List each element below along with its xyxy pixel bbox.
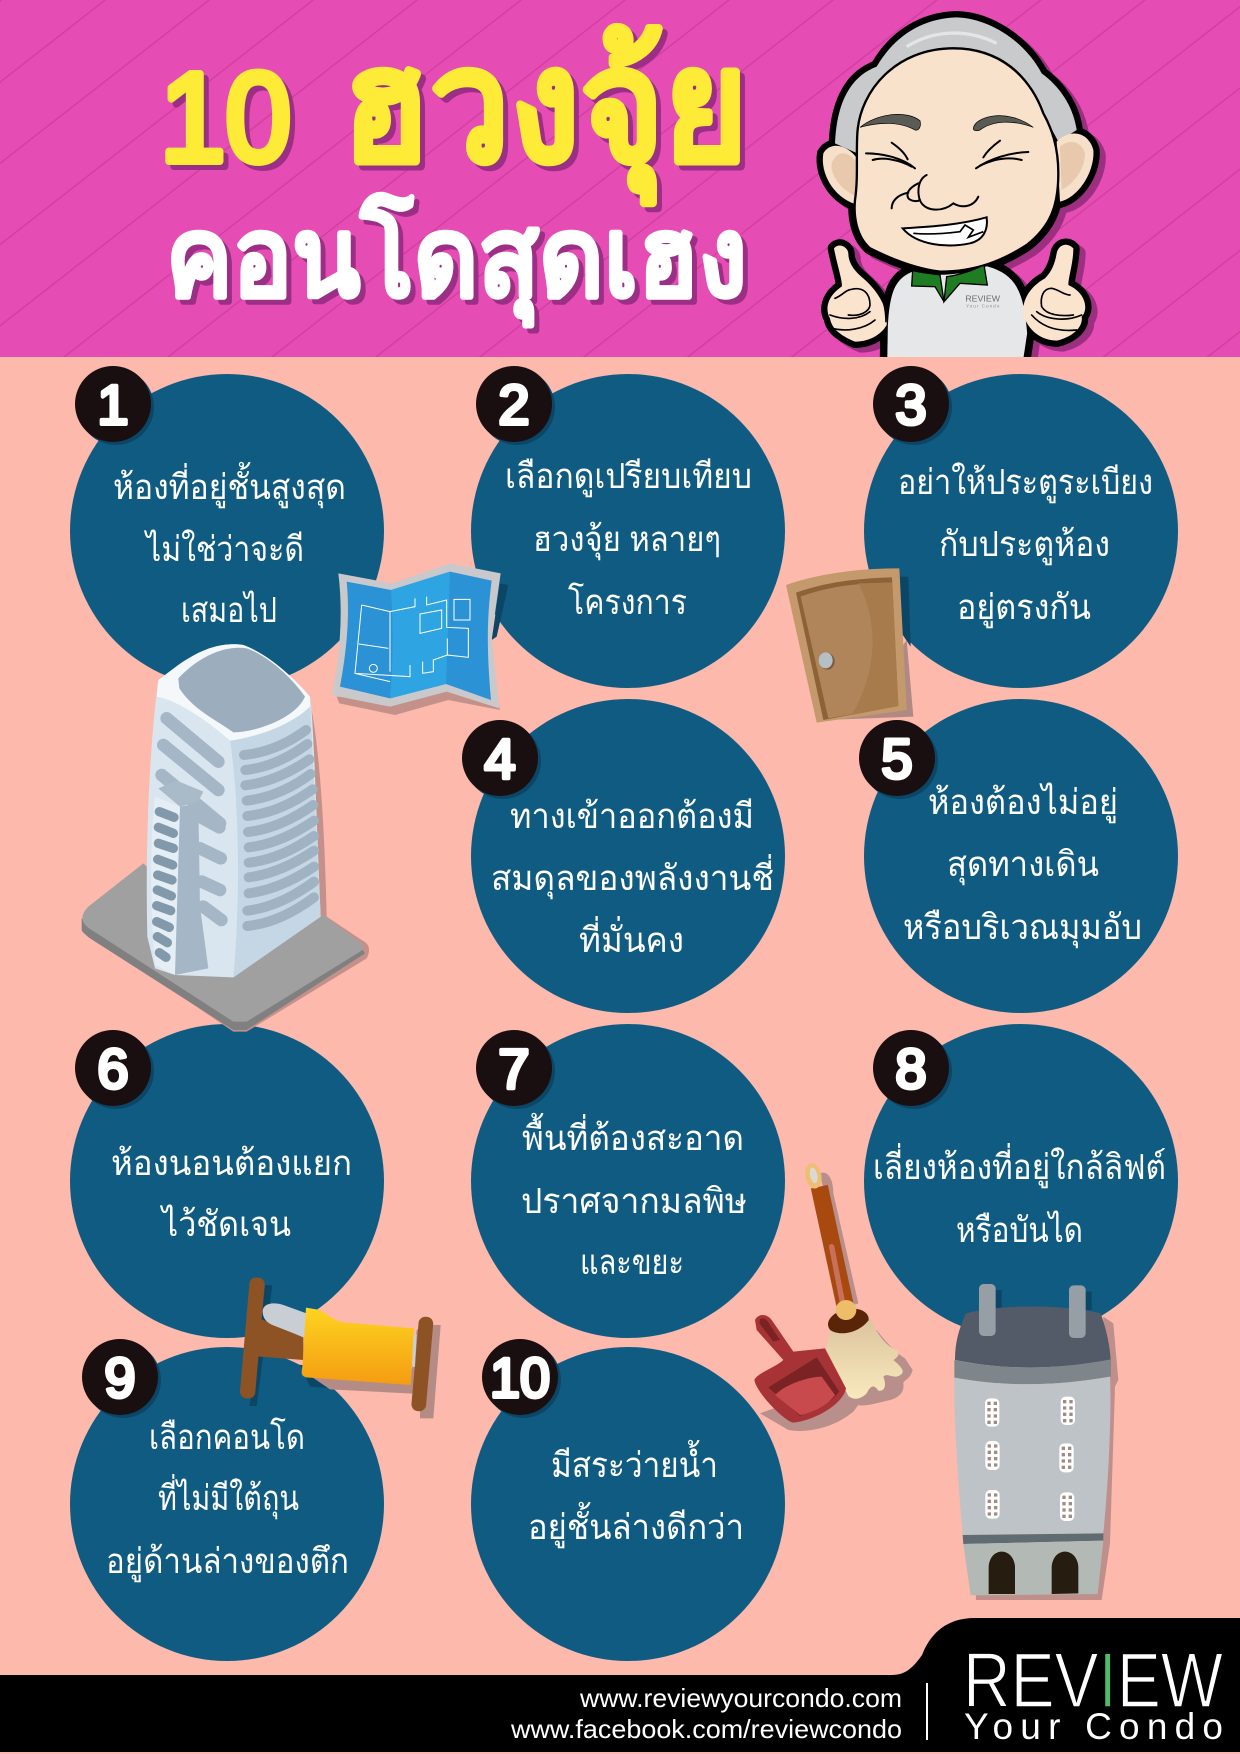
badge 4 [462, 720, 541, 799]
title line 1: ฮวงจุ้ย [347, 21, 753, 208]
text 10: มีสระว่ายน้ำ [551, 1439, 718, 1485]
tip 6 [75, 1030, 352, 1244]
badge 9: 9 [104, 1346, 136, 1409]
text 1: ไม่ใช่ว่าจะดี [143, 529, 304, 569]
badge 3 [873, 366, 952, 445]
title line 1: ฮวงจุ้ย [342, 16, 748, 203]
tip 5 [859, 720, 1142, 948]
text 3: กับประตูห้อง [939, 525, 1110, 565]
tip 3 [873, 366, 1153, 628]
text 5: ห้องต้องไม่อยู่ [928, 782, 1118, 823]
right ear [1057, 134, 1093, 202]
text 10: อยู่ชั้นล่างดีกว่า [528, 1501, 744, 1548]
text 9: อยู่ด้านล่างของตึก [106, 1542, 349, 1582]
left hand [827, 246, 887, 342]
text 4: สมดุลของพลังงานชี่ [491, 854, 774, 899]
text 2 [505, 457, 752, 622]
text 1: ห้องที่อยู่ชั้นสูงสุด [113, 461, 346, 508]
badge 10: 10 [490, 1346, 550, 1409]
text 3: อยู่ตรงกัน [957, 588, 1091, 628]
shirt [887, 266, 1028, 357]
text 9: เลือกคอนโด [149, 1417, 305, 1457]
badge 2 [476, 366, 555, 445]
text 3: อย่าให้ประตูระเบียง [898, 462, 1153, 503]
icon: office tower [82, 644, 369, 1032]
mascot [823, 17, 1099, 371]
title line 1: 10 [165, 52, 296, 193]
tip 4 [462, 720, 774, 960]
badge 7: 7 [498, 1037, 530, 1100]
tip 7 [476, 1030, 747, 1282]
badge 1: 1 [97, 373, 129, 436]
text 1 [113, 461, 346, 630]
text 1: เสมอไป [181, 590, 277, 630]
text 5: หรือบริเวณมุมอับ [903, 908, 1142, 948]
footer [0, 1618, 1240, 1752]
tip 8 [873, 1030, 1166, 1250]
text 5 [903, 782, 1142, 948]
circle panels [70, 374, 1178, 1661]
website links: www.facebook.com/reviewcondo [510, 1714, 902, 1744]
shirt logo: Your Condo [966, 303, 1000, 308]
brand logo: REVIEW [963, 1636, 1223, 1724]
icon: broom and dustpan [754, 1162, 913, 1431]
icon: bed [239, 1277, 441, 1418]
right hand [1023, 245, 1085, 341]
icon: door [786, 568, 913, 723]
icon: grey building [954, 1284, 1118, 1600]
badge 6 [75, 1030, 154, 1109]
text 2: เลือกดูเปรียบเทียบ [505, 457, 752, 497]
text 10 [528, 1439, 744, 1548]
eyes [866, 141, 1028, 168]
website links: www.reviewyourcondo.com [579, 1683, 902, 1713]
hair [835, 17, 1077, 153]
tip 2 [476, 366, 752, 622]
badge 8 [873, 1030, 952, 1109]
badge 6: 6 [97, 1037, 129, 1100]
badge 8: 8 [895, 1037, 927, 1100]
smile [903, 217, 987, 245]
badge 3: 3 [895, 373, 927, 436]
text 6: ไว้ชัดเจน [159, 1204, 291, 1244]
text 5: สุดทางเดิน [947, 845, 1099, 885]
text 9 [106, 1417, 349, 1582]
badge 1 [75, 366, 154, 445]
text 8 [873, 1143, 1166, 1250]
badge 10 [482, 1339, 561, 1418]
text 7: และขยะ [580, 1243, 684, 1282]
text 7: พื้นที่ต้องสะอาด [522, 1112, 744, 1158]
badge 7 [476, 1030, 555, 1109]
shirt logo: REVIEW [965, 294, 1001, 304]
title line 1: 10 [160, 47, 291, 188]
face [855, 48, 1058, 272]
title line 2: คอนโดสุดเฮง [171, 200, 752, 331]
text 8: เลี่ยงห้องที่อยู่ใกล้ลิฟต์ [873, 1143, 1166, 1188]
text 8: หรือบันได [956, 1210, 1083, 1250]
brand logo: Your Condo [964, 1706, 1223, 1747]
badge 9 [82, 1339, 161, 1418]
text 2: โครงการ [568, 582, 687, 622]
text 2: ฮวงจุ้ย หลายๆ [533, 520, 721, 560]
title line 2: คอนโดสุดเฮง [166, 195, 747, 326]
tip 9 [82, 1339, 349, 1582]
icon: floor plan map [332, 563, 508, 715]
text 4 [491, 797, 774, 960]
badge 5: 5 [881, 727, 913, 790]
text 9: ที่ไม่มีใต้ถุน [158, 1474, 299, 1519]
text 7: ปราศจากมลพิษ [521, 1182, 747, 1221]
left ear [823, 146, 858, 204]
collar [912, 271, 944, 302]
eyebrows [860, 114, 920, 130]
text 7 [521, 1112, 747, 1282]
tip 10 [482, 1339, 744, 1548]
badge 2: 2 [498, 373, 530, 436]
text 6: ห้องนอนต้องแยก [111, 1144, 352, 1183]
badge 4: 4 [484, 727, 516, 790]
header banner [0, 0, 1240, 371]
shirt logo [966, 296, 1000, 308]
nose [892, 175, 978, 210]
website links [510, 1683, 902, 1744]
title line 1 [160, 16, 753, 208]
badge 5 [859, 720, 938, 799]
text 4: ที่มั่นคง [579, 916, 684, 960]
tip 1 [75, 366, 346, 630]
text 4: ทางเข้าออกต้องมี [510, 797, 754, 836]
text 6 [111, 1144, 352, 1244]
text 3 [898, 462, 1153, 628]
